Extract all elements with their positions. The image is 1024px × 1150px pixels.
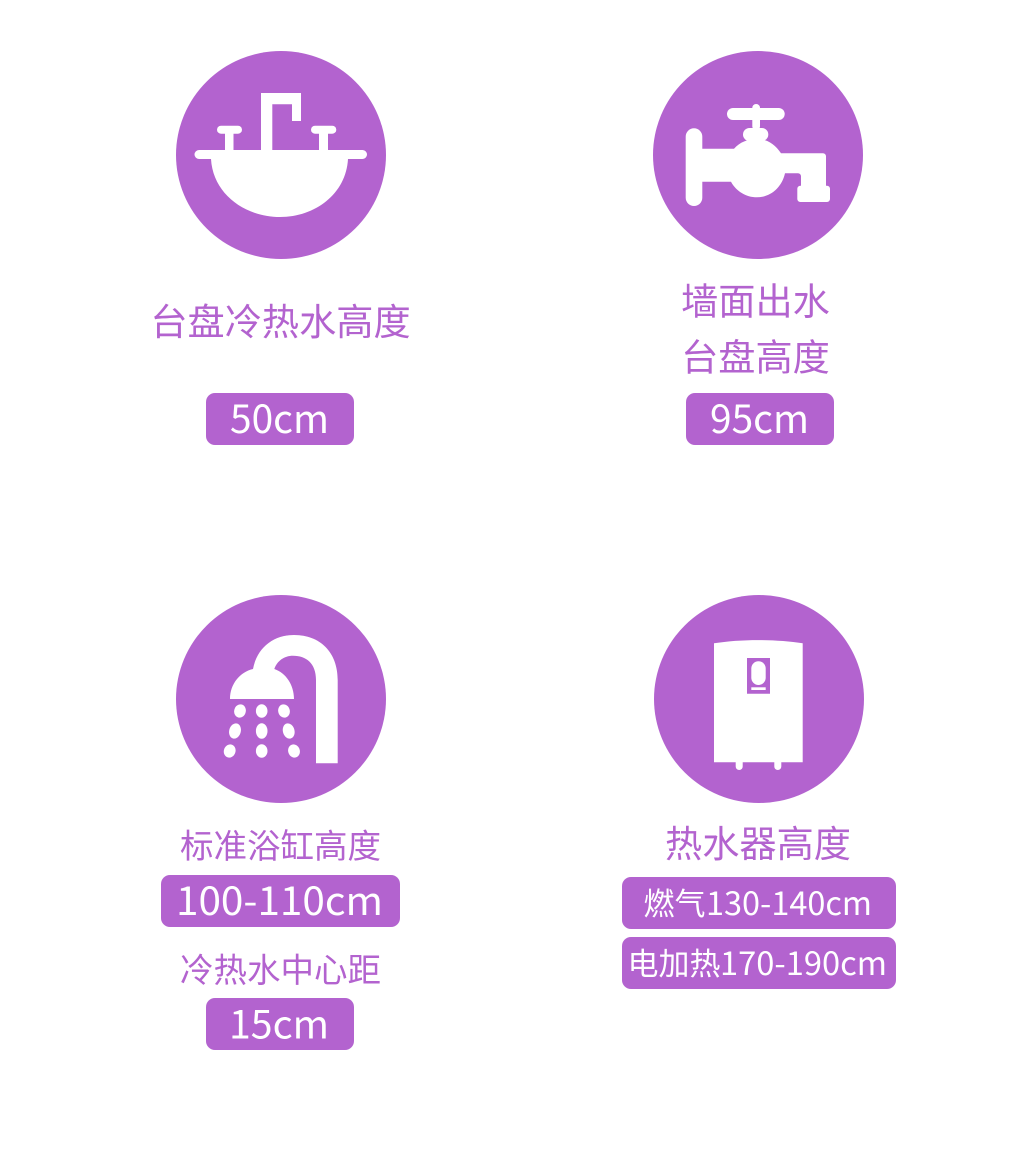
icon: wash basin [176, 51, 386, 259]
value: electric heater: 170-190cm [720, 939, 887, 985]
icon: shower [176, 595, 386, 803]
value: gas heater: 130-140cm [706, 879, 872, 925]
heading: wall outlet height [681, 272, 830, 382]
heading: basin counter height: 台盘冷热水高度 [150, 292, 411, 346]
value: 50cm [206, 389, 354, 445]
panel: bathtub height [161, 595, 400, 1050]
value: 15cm: 15cm [229, 994, 329, 1050]
value: electric heater: 电加热 [628, 939, 720, 984]
value: gas heater: 燃气 [644, 879, 706, 924]
value: 95cm: 95cm [710, 389, 809, 445]
value: gas heater [622, 877, 896, 929]
value: 15cm [206, 994, 354, 1050]
heading: wall outlet height: 墙面出水 [681, 272, 830, 326]
value: 95cm [686, 389, 834, 445]
heading: wall outlet height: 台盘高度 [681, 328, 830, 382]
panel: water heater height [622, 595, 896, 989]
icon: water heater [654, 595, 864, 803]
heading: standard bathtub height: 标准浴缸高度 [180, 819, 381, 868]
value: 100-110cm: 100-110cm [176, 871, 383, 927]
heading: water heater height: 热水器高度 [665, 814, 851, 868]
heading: hot and cold centre distance: 冷热水中心距 [180, 943, 381, 992]
value: electric heater [622, 937, 896, 989]
value: 50cm: 50cm [230, 389, 329, 445]
panel: wall outlet height [653, 51, 863, 445]
icon: wall tap [653, 51, 863, 259]
panel: basin counter height [150, 51, 411, 445]
